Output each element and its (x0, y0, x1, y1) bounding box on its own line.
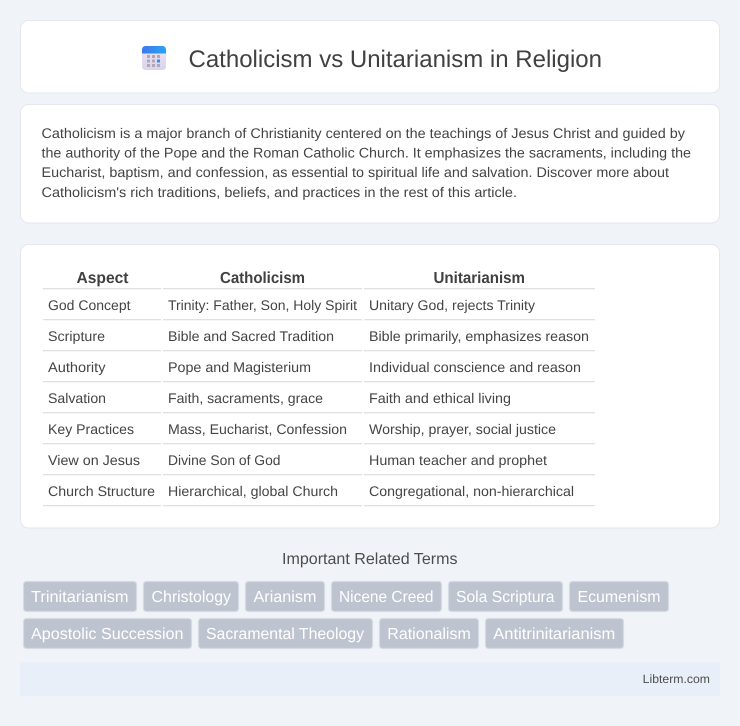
table row: God Concept (43, 297, 595, 320)
tag: Antitrinitarianism: Antitrinitarianism (493, 626, 615, 643)
table row: God Concept: Trinity: Father, Son, Holy Spirit (168, 297, 357, 313)
tag: Rationalism: Rationalism (387, 626, 471, 643)
table row: Authority: Authority (48, 359, 106, 375)
tag: Sola Scriptura: Sola Scriptura (456, 589, 555, 606)
table row: View on Jesus (43, 452, 595, 475)
table row: Key Practices: Mass, Eucharist, Confession (168, 421, 347, 437)
text block: description: Catholicism is a major branch of Christianity centered on the teachings of Jesus Christ and guided by (42, 125, 685, 141)
tag: Arianism (246, 582, 324, 612)
tag: Rationalism (380, 618, 478, 648)
table row: Scripture (43, 328, 595, 351)
table row: Scripture: Bible primarily, emphasizes reason (369, 328, 589, 344)
tag: Christology: Christology (152, 589, 231, 606)
tag: Trinitarianism: Trinitarianism (31, 589, 128, 606)
heading: related terms: Important Related Terms (282, 551, 458, 568)
table row: Salvation: Salvation (48, 390, 106, 406)
tag: Apostolic Succession: Apostolic Succession (31, 626, 184, 643)
tag: Christology (144, 582, 238, 612)
table header row: Catholicism (220, 270, 305, 287)
table row: Church Structure (43, 483, 595, 506)
tag: Ecumenism: Ecumenism (578, 589, 660, 606)
table row: Scripture: Scripture (48, 328, 105, 344)
table row: Authority: Individual conscience and reason (369, 359, 581, 375)
tag: Nicene Creed: Nicene Creed (339, 589, 434, 606)
table row: Church Structure: Hierarchical, global Church (168, 483, 338, 499)
table row: View on Jesus: Divine Son of God (168, 452, 280, 468)
table row: Key Practices: Key Practices (48, 421, 134, 437)
table row: Scripture: Bible and Sacred Tradition (168, 328, 334, 344)
table row: God Concept: Unitary God, rejects Trinity (369, 297, 535, 313)
tag: Ecumenism (570, 582, 668, 612)
panel: intro paragraph (20, 104, 720, 223)
tag: Apostolic Succession (24, 618, 192, 648)
table row: Key Practices (43, 421, 595, 444)
panel: comparison table (20, 244, 720, 528)
table row: Authority: Pope and Magisterium (168, 359, 311, 375)
table row: View on Jesus: View on Jesus (48, 452, 140, 468)
table row: Church Structure: Church Structure (48, 483, 155, 499)
table header row: Aspect (76, 270, 129, 287)
table row: Church Structure: Congregational, non-hierarchical (369, 483, 574, 499)
table row: Key Practices: Worship, prayer, social justice (369, 421, 556, 437)
text block: description: Catholicism's rich traditions, beliefs, and practices in the rest of this article. (42, 184, 517, 200)
panel: header (20, 20, 720, 93)
title: Catholicism vs Unitarianism in Religion (188, 46, 602, 73)
table row: View on Jesus: Human teacher and prophet (369, 452, 547, 468)
text block: description: Eucharist, baptism, and confession, as essential to spiritual life and salvation. Discover more about (42, 164, 669, 180)
tag: Trinitarianism (24, 582, 136, 612)
table row: Salvation: Faith and ethical living (369, 390, 511, 406)
tag: Sacramental Theology (198, 618, 372, 648)
table row: God Concept: God Concept (48, 297, 131, 313)
tag: Arianism: Arianism (254, 589, 316, 606)
icon: calendar (142, 46, 166, 70)
table header row: Unitarianism (434, 270, 525, 287)
tag: Antitrinitarianism (486, 618, 624, 648)
tag: Sacramental Theology: Sacramental Theology (206, 626, 364, 643)
tag: Sola Scriptura (448, 582, 562, 612)
table row: Salvation: Faith, sacraments, grace (168, 390, 323, 406)
footer credit: Libterm.com (643, 672, 710, 686)
tag group: related terms (24, 582, 668, 648)
text block: description (42, 125, 691, 200)
table row: Salvation (43, 390, 595, 413)
table header row (43, 270, 595, 289)
footer bar (20, 662, 720, 696)
text block: description: the authority of the Pope and the Roman Catholic Church. It emphasizes the sacraments, including the (42, 145, 691, 161)
table row: Authority (43, 359, 595, 382)
tag: Nicene Creed (332, 582, 442, 612)
